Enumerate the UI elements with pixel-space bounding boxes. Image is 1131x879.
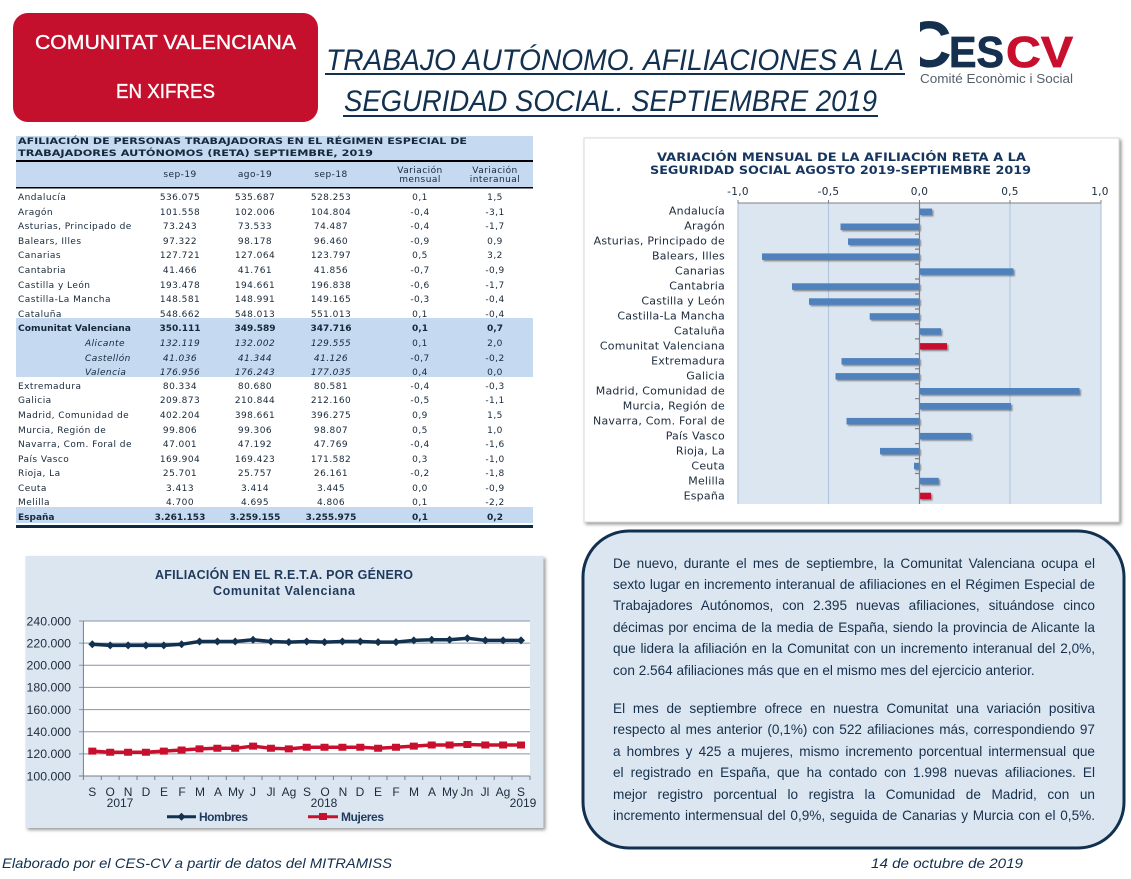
- category labels: Castilla-La Mancha: [617, 310, 725, 322]
- x axis labels: M: [195, 785, 205, 799]
- table rows: Cataluña: [18, 310, 62, 320]
- table rows: -2,2: [485, 498, 505, 508]
- logo: CES-CV: CV: [1006, 28, 1074, 77]
- panel: bar chart variación mensual: [584, 138, 1119, 522]
- table rows: 0,0: [487, 368, 503, 378]
- table rows: 0,1: [412, 339, 428, 349]
- table rows: España: [18, 513, 55, 523]
- category axis: [915, 203, 920, 504]
- x axis labels: E: [374, 785, 382, 799]
- table rows: 41.036: [163, 354, 197, 364]
- text block: commentary: Trabajadores Autónomos, con 2.395 nuevas afiliaciones, situándose cinco: [613, 598, 1095, 613]
- table rows: Aragón: [18, 207, 53, 218]
- logo: CES-CV: ES: [949, 28, 1004, 77]
- table heading: TRABAJADORES AUTÓNOMOS (RETA) SEPTIEMBRE, 2019: [18, 147, 373, 159]
- table rows: 99.306: [238, 426, 272, 436]
- legend: [167, 810, 384, 824]
- text block: commentary: respecto al mes anterior (0,1%) con 522 afiliaciones más, correspondiendo 97: [613, 722, 1095, 737]
- table rows: 0,7: [487, 324, 503, 334]
- table rows: Castilla-La Mancha: [18, 295, 111, 305]
- category labels: Comunitat Valenciana: [600, 340, 725, 352]
- text block: commentary: a hombres y 425 a mujeres, mismo incremento porcentual intermensual que: [613, 744, 1095, 759]
- chart title: SEGURIDAD SOCIAL AGOSTO 2019-SEPTIEMBRE 2019: [650, 163, 1031, 177]
- x axis labels: S: [517, 785, 525, 799]
- table column headers: ago-19: [238, 170, 272, 180]
- x axis labels: N: [124, 785, 132, 799]
- logo: CES-CV: C: [904, 7, 952, 81]
- x axis labels: D: [142, 785, 151, 799]
- table rows: Asturias, Principado de: [18, 222, 132, 232]
- table rows: -1,8: [485, 469, 505, 479]
- text block: commentary: que lidera la afiliación en la Comunitat con un incremento interanual del 2,0%,: [613, 641, 1095, 656]
- table rows: Castilla y León: [18, 280, 90, 291]
- text block: commentary: [613, 556, 1095, 823]
- table rows: -0,9: [410, 237, 430, 247]
- x axis and plot area: 0,0: [911, 186, 928, 198]
- table rows: 104.804: [311, 208, 351, 218]
- table rows: -0,2: [410, 469, 430, 479]
- table rows: 3.445: [317, 484, 345, 494]
- text block: commentary: décimas por encima de la media de España, siendo la provincia de Alicante la: [613, 620, 1095, 635]
- table rows: 47.192: [238, 440, 272, 450]
- table rows: Melilla: [18, 498, 50, 508]
- category labels: Extremadura: [651, 354, 725, 368]
- table rows: País Vasco: [18, 455, 69, 465]
- table rows: 132.119: [160, 339, 200, 349]
- chart title: [650, 149, 1031, 177]
- table rows: 41.856: [314, 266, 348, 276]
- table rows: -0,4: [485, 310, 505, 320]
- table rows: 47.769: [314, 440, 348, 450]
- table rows: -1,6: [485, 440, 505, 450]
- table rows: 528.253: [311, 193, 351, 203]
- table rows: 41.126: [314, 354, 348, 364]
- badge: Comunitat Valenciana en xifres: EN XIFRES: [116, 81, 215, 103]
- table rows: 102.006: [235, 208, 275, 218]
- table rows: Murcia, Región de: [18, 425, 106, 436]
- table rows: -0,7: [410, 266, 430, 276]
- table rows: 123.797: [311, 251, 351, 261]
- table rows: 148.581: [160, 295, 200, 305]
- x axis labels: Ag: [496, 785, 510, 799]
- table rows: 0,1: [412, 498, 428, 508]
- table rows: 132.002: [235, 339, 275, 349]
- x axis labels: My: [228, 785, 244, 799]
- table rows: Comunitat Valenciana: [18, 324, 131, 334]
- table rows: -1,0: [485, 455, 505, 465]
- table rows: 212.160: [311, 396, 351, 406]
- table rows: Andalucía: [18, 193, 66, 203]
- table rows: -1,7: [485, 222, 505, 232]
- chart title: [155, 567, 413, 598]
- y axis labels: [27, 614, 71, 784]
- x axis labels: O: [320, 785, 330, 799]
- category labels: País Vasco: [666, 430, 725, 442]
- table rows: 73.243: [163, 222, 197, 232]
- text block: commentary: mejor registro porcentual lo registra la Comunidad de Madrid, con un: [613, 787, 1095, 802]
- category labels: Balears, Illes: [652, 250, 725, 262]
- category labels: España: [684, 490, 725, 502]
- table rows: 98.178: [238, 237, 272, 247]
- table rows: Madrid, Comunidad de: [18, 411, 129, 421]
- table rows: 1,5: [487, 193, 503, 203]
- table rows: 349.589: [234, 324, 276, 334]
- table rows: 0,1: [412, 193, 428, 203]
- x axis labels: Ag: [282, 785, 296, 799]
- y axis labels: 160.000: [27, 703, 71, 717]
- table rows: 80.680: [238, 382, 272, 392]
- table rows: 548.013: [235, 310, 275, 320]
- table rows: 26.161: [314, 469, 348, 479]
- table rows: 3.413: [166, 484, 194, 494]
- table rows: 101.558: [160, 208, 200, 218]
- x axis labels: Jn: [461, 785, 473, 799]
- table rows: 350.111: [160, 324, 200, 334]
- table rows: 3.414: [241, 484, 269, 494]
- x axis and plot area: -1,0: [727, 186, 749, 198]
- table rows: [18, 193, 505, 523]
- table rows: -1,1: [485, 396, 505, 406]
- category labels: Galicia: [686, 370, 725, 382]
- text block: commentary: El mes de septiembre ofrece en nuestra Comunitat una variación positiva: [613, 701, 1095, 716]
- table rows: 41.466: [163, 266, 197, 276]
- table heading: AFILIACIÓN DE PERSONAS TRABAJADORAS EN EL RÉGIMEN ESPECIAL DE: [18, 135, 467, 147]
- table rows: -0,4: [410, 222, 430, 232]
- title: TRABAJO AUTÓNOMO. AFILIACIONES A LA: [326, 44, 904, 77]
- table rows: 0,2: [487, 513, 503, 523]
- category labels: Madrid, Comunidad de: [596, 384, 725, 398]
- table rows: 97.322: [163, 237, 197, 247]
- table: afiliación RETA: [16, 135, 533, 528]
- table column headers: sep-18: [314, 170, 348, 180]
- table rows: -0,5: [410, 396, 430, 406]
- x axis labels: F: [392, 785, 400, 799]
- table rows: -3,1: [485, 208, 505, 218]
- table rows: 129.555: [311, 339, 351, 349]
- category labels: Rioja, La: [676, 444, 725, 458]
- table rows: 47.001: [163, 440, 197, 450]
- table rows: 73.533: [238, 222, 272, 232]
- x axis labels: N: [339, 785, 347, 799]
- table rows: 148.991: [235, 295, 275, 305]
- table rows: Extremadura: [18, 382, 81, 392]
- table rows: 41.344: [238, 354, 272, 364]
- text block: commentary: con 2.564 afiliaciones más que en el mismo mes del ejercicio anterior.: [613, 663, 1035, 678]
- table column headers: [163, 165, 520, 185]
- table rows: -0,9: [485, 266, 505, 276]
- table rows: Balears, Illes: [18, 237, 82, 247]
- table rows: 0,5: [412, 426, 428, 436]
- table rows: 2,0: [487, 339, 503, 349]
- plot area: [79, 621, 530, 780]
- table rows: 127.721: [160, 251, 200, 261]
- category labels: Asturias, Principado de: [594, 234, 725, 248]
- table rows: 25.757: [238, 469, 272, 479]
- category labels: Melilla: [688, 474, 725, 488]
- table rows: 4.700: [166, 498, 194, 508]
- table rows: 177.035: [311, 368, 351, 378]
- table rows: 548.662: [160, 310, 200, 320]
- table rows: Cantabria: [18, 266, 66, 276]
- table rows: 176.243: [235, 368, 275, 378]
- table rows: 196.838: [311, 281, 351, 291]
- table rows: 0,1: [412, 324, 428, 334]
- table rows: -0,4: [410, 440, 430, 450]
- y axis labels: 220.000: [27, 636, 71, 650]
- x axis labels: J: [250, 785, 256, 799]
- x axis labels: 2018: [311, 796, 338, 810]
- badge: Comunitat Valenciana en xifres: [13, 13, 318, 122]
- category labels: Cataluña: [674, 324, 725, 338]
- table rows: Ceuta: [18, 484, 47, 494]
- title: SEGURIDAD SOCIAL. SEPTIEMBRE 2019: [344, 85, 877, 118]
- table rows: Alicante: [84, 339, 125, 349]
- x axis labels: My: [442, 785, 458, 799]
- x axis labels: O: [106, 785, 115, 799]
- x axis and plot area: [727, 186, 1109, 504]
- text block: commentary: el registrado en España, que ha contado con 1.998 nuevas afiliaciones. El: [613, 765, 1095, 780]
- panel: commentary background: [583, 531, 1124, 848]
- x axis labels: D: [356, 785, 365, 799]
- chart title: Comunitat Valenciana: [213, 584, 356, 598]
- table rows: 127.064: [235, 251, 275, 261]
- x axis labels: F: [178, 785, 186, 799]
- table rows: 193.478: [160, 281, 200, 291]
- table rows: -0,4: [410, 208, 430, 218]
- table rows: 4.806: [317, 498, 345, 508]
- table rows: -0,9: [485, 484, 505, 494]
- x axis labels: [88, 785, 537, 810]
- x axis labels: A: [428, 785, 436, 799]
- category labels: Andalucía: [669, 204, 725, 218]
- table rows: 0,3: [412, 455, 428, 465]
- table column headers: Variación: [397, 165, 443, 176]
- table rows: 41.761: [238, 266, 272, 276]
- footer: date: 14 de octubre de 2019: [871, 855, 1023, 871]
- table rows: -0,3: [410, 295, 430, 305]
- table rows: 209.873: [160, 396, 200, 406]
- legend: Hombres: [199, 810, 248, 824]
- category labels: Navarra, Com. Foral de: [593, 414, 725, 428]
- x axis and plot area: -0,5: [818, 186, 839, 198]
- table rows: -0,4: [410, 382, 430, 392]
- y axis labels: 120.000: [27, 747, 71, 761]
- logo: CES-CV: Comité Econòmic i Social: [920, 71, 1073, 86]
- table rows: -0,7: [410, 354, 430, 364]
- table rows: -1,7: [485, 281, 505, 291]
- text block: commentary: incremento intermensual del 0,9%, seguida de Canarias y Murcia con el 0,5%.: [613, 808, 1095, 823]
- table rows: 0,9: [412, 411, 428, 421]
- table rows: Castellón: [85, 353, 131, 364]
- title: [325, 44, 905, 118]
- category labels: [593, 204, 725, 502]
- panel: line chart afiliación por género: [26, 556, 544, 828]
- table rows: Canarias: [18, 251, 61, 261]
- table rows: 98.807: [314, 426, 348, 436]
- bars: [762, 208, 1080, 499]
- table rows: -0,2: [485, 354, 505, 364]
- chart title: AFILIACIÓN EN EL R.E.T.A. POR GÉNERO: [155, 567, 413, 582]
- table rows: 171.582: [311, 455, 351, 465]
- table rows: 96.460: [314, 237, 348, 247]
- series: Hombres: [88, 634, 525, 649]
- table rows: 3.259.155: [230, 513, 280, 523]
- table rows: 0,9: [487, 237, 503, 247]
- table rows: Rioja, La: [18, 469, 61, 479]
- table rows: Valencia: [85, 368, 126, 378]
- x axis labels: A: [214, 785, 222, 799]
- table heading: [18, 135, 467, 159]
- badge: Comunitat Valenciana en xifres: COMUNITAT VALENCIANA: [35, 32, 297, 54]
- table rows: 4.695: [241, 498, 269, 508]
- table rows: 194.661: [235, 281, 275, 291]
- x axis and plot area: 1,0: [1091, 186, 1109, 198]
- y axis labels: 140.000: [27, 725, 71, 739]
- x axis labels: Jl: [481, 785, 489, 799]
- table rows: 0,4: [412, 368, 428, 378]
- y axis labels: 200.000: [27, 658, 71, 672]
- table rows: -0,3: [485, 382, 505, 392]
- table rows: 74.487: [314, 222, 348, 232]
- table rows: 535.687: [235, 193, 275, 203]
- table rows: 536.075: [160, 193, 200, 203]
- chart title: VARIACIÓN MENSUAL DE LA AFILIACIÓN RETA A LA: [657, 149, 1026, 164]
- table rows: 3.261.153: [155, 513, 205, 523]
- x axis labels: S: [303, 785, 311, 799]
- table rows: Navarra, Com. Foral de: [18, 440, 132, 450]
- logo: CES-CV: [920, 21, 1074, 83]
- category labels: Castilla y León: [641, 294, 725, 308]
- table rows: Galicia: [18, 396, 52, 406]
- x axis labels: M: [409, 785, 419, 799]
- legend: Mujeres: [341, 810, 384, 824]
- y axis labels: 240.000: [27, 614, 71, 628]
- table rows: 1,5: [487, 411, 503, 421]
- x axis labels: 2019: [510, 796, 537, 810]
- table rows: 25.701: [163, 469, 197, 479]
- x axis and plot area: 0,5: [1001, 186, 1019, 198]
- text block: commentary: sexto lugar en incremento interanual de afiliaciones en el Régimen Especial de: [613, 577, 1095, 592]
- table column headers: interanual: [470, 175, 520, 185]
- category labels: Aragón: [684, 220, 725, 232]
- table rows: 176.956: [160, 368, 200, 378]
- table rows: 396.275: [311, 411, 351, 421]
- series: Mujeres: [88, 741, 525, 756]
- category labels: Cantabria: [669, 280, 725, 292]
- table rows: 0,5: [412, 251, 428, 261]
- table rows: 169.423: [235, 455, 275, 465]
- table rows: 149.165: [311, 295, 351, 305]
- table rows: 3,2: [487, 251, 503, 261]
- table rows: -0,4: [485, 295, 505, 305]
- table rows: 3.255.975: [306, 513, 356, 523]
- table rows: 99.806: [163, 426, 197, 436]
- table rows: 398.661: [235, 411, 275, 421]
- table column headers: mensual: [399, 175, 441, 185]
- table rows: 1,0: [487, 426, 503, 436]
- table column headers: Variación: [472, 165, 518, 176]
- footer: source: Elaborado por el CES-CV a partir de datos del MITRAMISS: [2, 855, 393, 871]
- table rows: 169.904: [160, 455, 200, 465]
- category labels: Ceuta: [691, 460, 725, 472]
- y axis labels: 180.000: [27, 680, 71, 694]
- y axis labels: 100.000: [27, 770, 71, 784]
- x axis labels: Jl: [267, 785, 275, 799]
- x axis labels: E: [160, 785, 168, 799]
- table rows: 0,1: [412, 513, 428, 523]
- table rows: 210.844: [235, 396, 275, 406]
- table rows: 347.716: [310, 324, 352, 334]
- table column headers: sep-19: [163, 170, 197, 180]
- table rows: 80.581: [314, 382, 348, 392]
- table rows: 0,0: [412, 484, 428, 494]
- x axis labels: 2017: [107, 796, 134, 810]
- table rows: 0,1: [412, 310, 428, 320]
- table rows: 402.204: [160, 411, 200, 421]
- category labels: Murcia, Región de: [623, 400, 725, 412]
- table rows: 551.013: [311, 310, 351, 320]
- x axis labels: S: [88, 785, 96, 799]
- table rows: -0,6: [410, 281, 430, 291]
- category labels: Canarias: [675, 264, 725, 278]
- text block: commentary: De nuevo, durante el mes de septiembre, la Comunitat Valenciana ocupa el: [613, 556, 1095, 571]
- table rows: 80.334: [163, 382, 197, 392]
